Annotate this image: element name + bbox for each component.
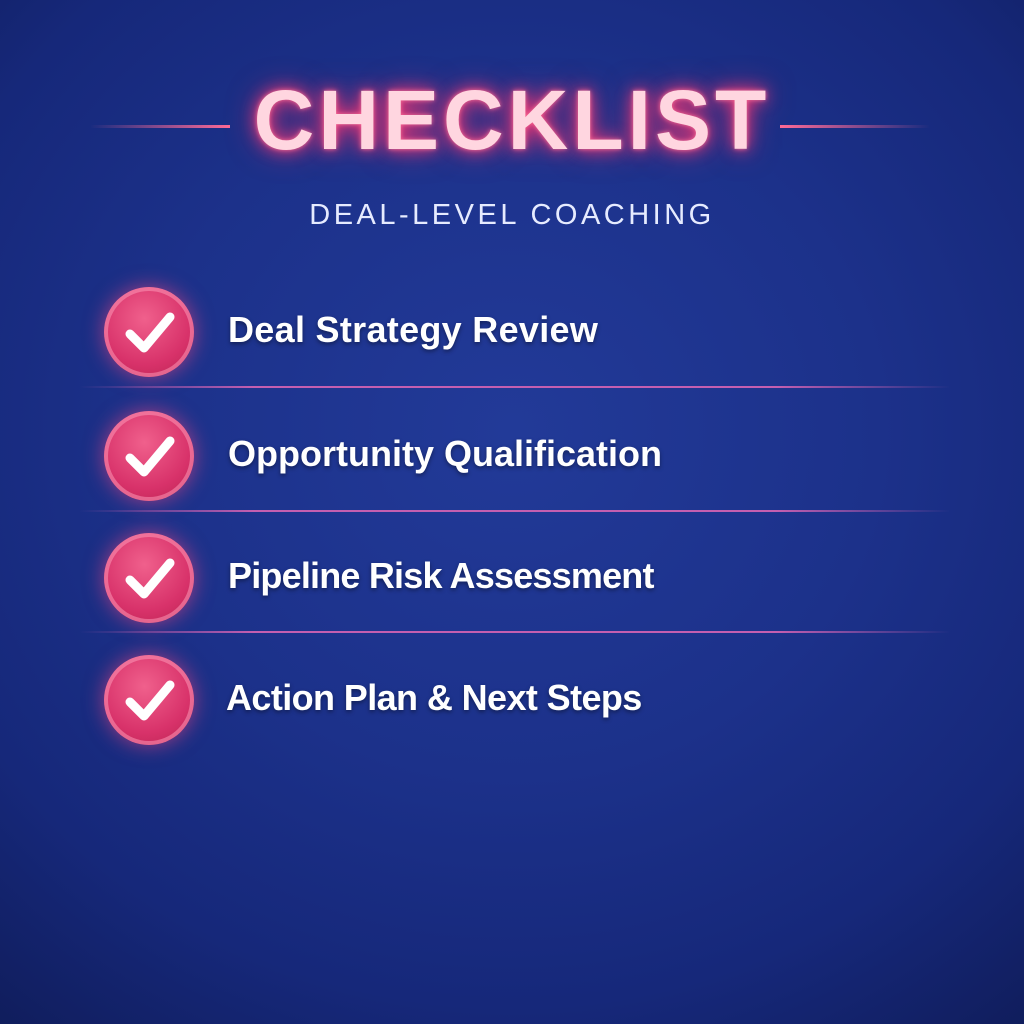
title glow lines [90, 125, 230, 128]
icon: check [104, 655, 194, 745]
item 3 [90, 520, 656, 636]
icon: check [104, 533, 194, 623]
label: Deal Strategy Review [228, 309, 598, 350]
icon: check [104, 411, 194, 501]
title: CHECKLIST [254, 73, 770, 167]
item 2 [90, 398, 662, 514]
label: Pipeline Risk Assessment [228, 555, 654, 596]
label: Opportunity Qualification [228, 433, 662, 474]
subtitle: DEAL-LEVEL COACHING [309, 199, 715, 231]
item 4 [90, 642, 642, 759]
icon: check [104, 287, 194, 377]
label: Action Plan & Next Steps [226, 677, 642, 718]
item 1 [90, 274, 600, 390]
